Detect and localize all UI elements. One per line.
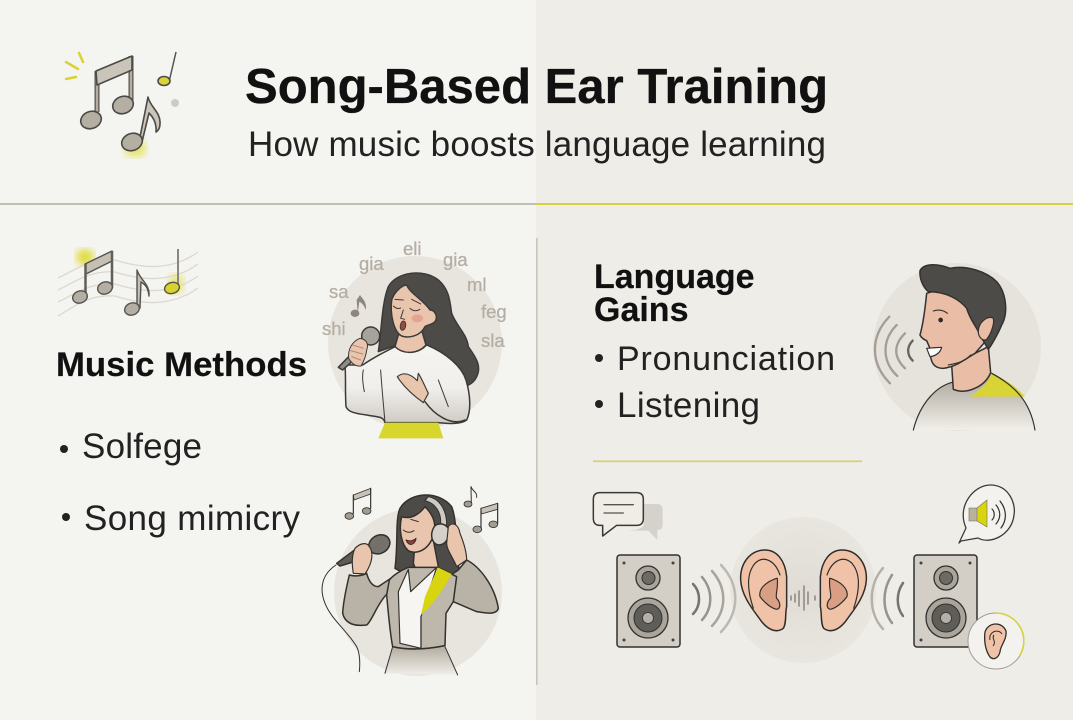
illustration: singer with syllables — [322, 238, 507, 438]
icon: ear badge — [968, 613, 1024, 669]
syllable words: gia — [359, 253, 384, 274]
list: language gains — [595, 340, 835, 425]
yellow divider — [593, 460, 862, 462]
heading: music methods: Music Methods — [56, 346, 307, 384]
icon: left ear — [741, 550, 787, 631]
syllable words: eli — [403, 238, 422, 259]
subtitle: How music boosts language learning — [248, 125, 826, 164]
illustration: singer with headphones — [322, 487, 502, 676]
syllable words: feg — [481, 301, 507, 322]
icon: sound wave between ears — [791, 586, 815, 610]
syllable words: gia — [443, 249, 468, 270]
icon: sound waves left — [693, 565, 735, 632]
icon: right speaker — [914, 555, 977, 647]
icon: header music notes — [66, 52, 179, 157]
syllable words: ml — [467, 274, 487, 295]
illustration: ears in circle — [730, 517, 876, 663]
icon: sound waves right — [872, 568, 903, 629]
syllable words — [322, 238, 507, 351]
icon: left speaker — [617, 555, 680, 647]
icon: right ear — [820, 550, 866, 631]
syllable words: sa — [329, 281, 349, 302]
title: Song-Based Ear Training — [245, 60, 828, 114]
list: language gains: Pronunciation — [617, 340, 835, 378]
list: language gains: Listening — [617, 386, 760, 425]
icon: speaker speech bubble — [959, 485, 1014, 543]
icon: staff with notes — [58, 249, 198, 317]
heading: language gains: Gains — [594, 291, 688, 329]
heading: language gains: Language — [594, 258, 755, 296]
list: music methods: Song mimicry — [84, 499, 300, 538]
list: music methods: Solfege — [82, 427, 202, 466]
syllable words: shi — [322, 318, 346, 339]
icon: speech bubbles — [593, 493, 663, 540]
illustration: man speaking — [873, 263, 1041, 431]
list: music methods — [60, 427, 300, 538]
header divider — [0, 203, 1073, 205]
syllable words: sla — [481, 330, 505, 351]
